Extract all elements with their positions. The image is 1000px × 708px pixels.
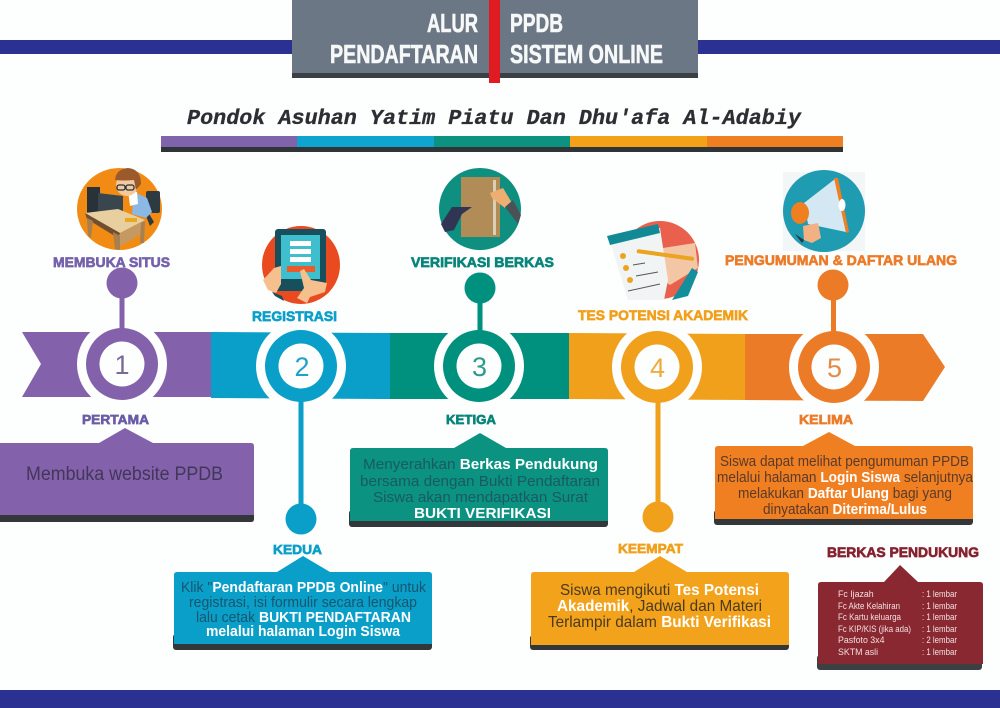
heading: alur pendaftaran: ALUR	[427, 8, 478, 38]
text: keempat: Terlampir dalam Bukti Verifikasi	[548, 614, 771, 631]
heading: alur pendaftaran: SISTEM ONLINE	[510, 39, 663, 69]
document list: SKTM asli	[838, 647, 878, 657]
document list	[838, 589, 957, 657]
text: keempat: Siswa mengikuti Tes Potensi	[560, 582, 759, 599]
step 4 marker: 4	[650, 353, 665, 383]
step 3 marker: 3	[472, 352, 487, 382]
icon: megaphone	[783, 170, 865, 252]
panel: berkas pendukung	[817, 565, 983, 670]
text: keempat	[548, 582, 771, 631]
label: verifikasi berkas: VERIFIKASI BERKAS	[411, 254, 554, 270]
document list: Pasfoto 3x4	[838, 635, 885, 645]
label: pengumuman dan daftar ulang: PENGUMUMAN & DAFTAR ULANG	[725, 252, 957, 268]
document list: Fc KIP/KIS (jika ada)	[838, 624, 911, 634]
text: kedua: Klik "Pendaftaran PPDB Online" untuk	[181, 580, 427, 596]
document list: Fc Ijazah	[838, 589, 874, 599]
step 1 marker: 1	[114, 350, 130, 380]
title colour bar	[161, 136, 843, 152]
text: kelima: Siswa dapat melihat pengumuman PPDB	[720, 454, 969, 470]
text: kedua: registrasi, isi formulir secara lengkap	[189, 595, 417, 611]
label: membuka situs: MEMBUKA SITUS	[53, 254, 170, 270]
text: ketiga: Menyerahkan Berkas Pendukung	[363, 457, 598, 473]
label: tes potensi akademik: TES POTENSI AKADEMIK	[578, 307, 748, 323]
icon: tablet registration	[262, 226, 340, 304]
heading: alur pendaftaran	[330, 8, 663, 69]
heading: alur pendaftaran: PPDB	[510, 8, 563, 38]
text: kelima: melalui halaman Login Siswa selanjutnya	[717, 470, 974, 486]
document list: : 1 lembar	[922, 612, 957, 622]
text: kelima: dinyatakan Diterima/Lulus	[763, 502, 927, 518]
icon: person at computer	[77, 168, 162, 250]
text: kedua: lalu cetak BUKTI PENDAFTARAN	[196, 610, 411, 626]
text: ketiga: BUKTI VERIFIKASI	[414, 506, 551, 522]
document list: Fc Akte Kelahiran	[838, 601, 900, 611]
ribbon timeline	[22, 332, 945, 401]
document list: : 1 lembar	[922, 589, 957, 599]
text: kedua	[181, 580, 427, 640]
text: kelima: melakukan Daftar Ulang bagi yang	[738, 486, 952, 502]
label: ketiga: KETIGA	[446, 412, 497, 427]
text: pertama: Membuka website PPDB	[26, 464, 223, 485]
panel: ketiga	[349, 433, 608, 527]
icon: test paper and pencil	[607, 221, 699, 300]
step 2 marker	[256, 321, 346, 534]
label: registrasi: REGISTRASI	[252, 308, 337, 324]
heading: alur pendaftaran: PENDAFTARAN	[330, 39, 478, 69]
label: berkas pendukung: BERKAS PENDUKUNG	[827, 545, 979, 560]
title: Pondok Asuhan Yatim Piatu Dan Dhu'afa Al-Adabiy	[187, 107, 802, 131]
text: keempat: Akademik, Jadwal dan Materi	[557, 598, 762, 615]
panel: keempat	[530, 556, 789, 650]
text: ketiga: bersama dengan Bukti Pendaftaran	[360, 474, 600, 490]
top band right	[697, 40, 1000, 54]
label: pertama: PERTAMA	[82, 412, 150, 427]
bottom band	[0, 690, 1000, 708]
text: ketiga: Siswa akan mendapatkan Surat	[373, 490, 588, 506]
step 3 marker	[434, 272, 524, 411]
step 2 marker: 2	[294, 352, 310, 382]
document list: : 2 lembar	[922, 635, 957, 645]
step 5 marker: 5	[827, 353, 842, 383]
panel: pertama	[0, 428, 254, 522]
text: ketiga	[360, 457, 600, 522]
label: keempat: KEEMPAT	[618, 541, 683, 556]
panel: kelima	[714, 432, 974, 525]
step 4 marker	[612, 322, 702, 532]
document list: : 1 lembar	[922, 624, 957, 634]
top band left	[0, 40, 293, 54]
panel: kedua	[173, 556, 432, 650]
icon: handing over files	[439, 168, 521, 250]
header panel	[292, 0, 698, 83]
text: kelima	[717, 454, 974, 518]
label: kelima: KELIMA	[799, 412, 854, 427]
step 5 marker	[789, 270, 879, 412]
document list: : 1 lembar	[922, 601, 957, 611]
text: kedua: melalui halaman Login Siswa	[206, 624, 401, 640]
step 1 marker	[77, 268, 167, 409]
label: kedua: KEDUA	[273, 542, 323, 557]
document list: : 1 lembar	[922, 647, 957, 657]
document list: Fc Kartu keluarga	[838, 612, 901, 622]
